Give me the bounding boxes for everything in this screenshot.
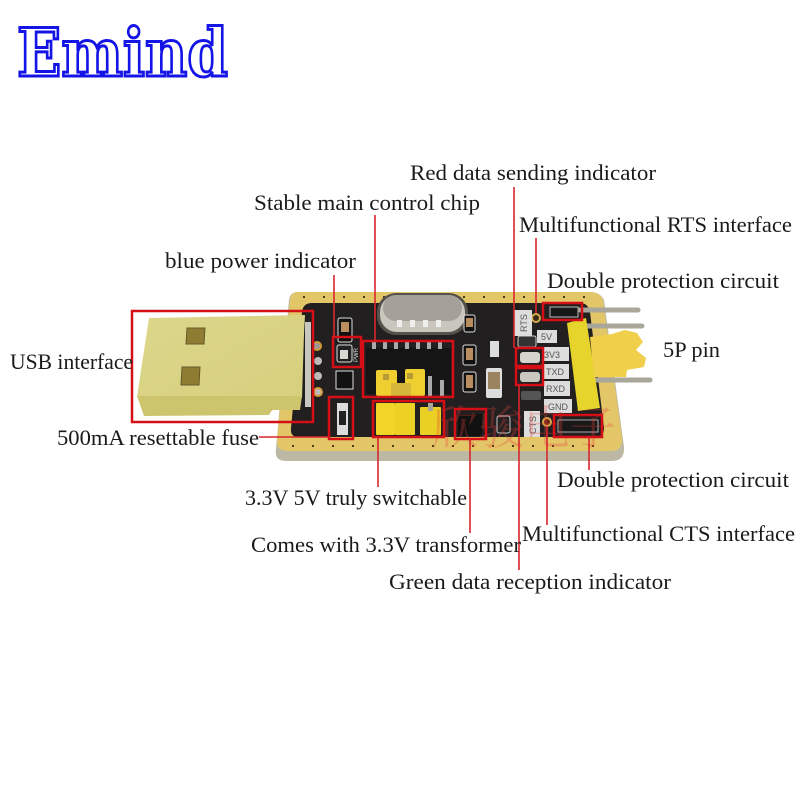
- right angle pins: [567, 310, 650, 411]
- silkscreen pin labels: 5V: [541, 332, 552, 342]
- watermark: 欣骏电子: [432, 403, 616, 454]
- brand logo: Emind: Emind: [17, 14, 228, 92]
- three pin yellow header: [376, 403, 441, 435]
- board edge: [276, 292, 624, 461]
- label: switchable voltage: 3.3V 5V truly switchable: [245, 485, 467, 510]
- label: 3.3V transformer: Comes with 3.3V transformer: [251, 532, 522, 557]
- main control chip: [366, 341, 451, 396]
- gold pad dots: [292, 297, 610, 446]
- silkscreen pin labels: PWR: [354, 347, 360, 362]
- crystal oscillator: [377, 293, 468, 335]
- USB connector plug: [137, 315, 311, 416]
- label: double protection circuit top: Double protection circuit: [547, 268, 779, 293]
- label: multifunctional CTS interface: Multifunctional CTS interface: [522, 521, 795, 546]
- silkscreen pin labels: GND: [548, 402, 568, 412]
- label: blue power indicator: blue power indicator: [165, 248, 357, 273]
- small components: [313, 307, 598, 436]
- label: USB interface: USB interface: [10, 349, 133, 374]
- silkscreen pin labels: RTS: [519, 314, 529, 332]
- label: multifunctional RTS interface: Multifunctional RTS interface: [519, 212, 792, 237]
- gold plating: [277, 292, 622, 451]
- label: 500mA resettable fuse: 500mA resettable fuse: [57, 425, 259, 450]
- silkscreen pin labels: RXD: [546, 384, 566, 394]
- label: stable main control chip: Stable main control chip: [254, 190, 480, 215]
- red leader lines: [259, 187, 589, 570]
- silkscreen pin labels: TXD: [546, 367, 565, 377]
- black solder mask: [291, 303, 604, 437]
- silkscreen pin labels: [354, 310, 572, 437]
- silkscreen pin labels: 3V3: [544, 350, 560, 360]
- small yellow jumper on chip: [376, 369, 425, 396]
- label: 5P pin: 5P pin: [663, 337, 720, 362]
- red highlight boxes: [132, 303, 602, 439]
- label: green data reception indicator: Green data reception indicator: [389, 569, 672, 594]
- 5P jumper cap: [590, 330, 646, 377]
- silkscreen pin labels: CTS: [528, 416, 538, 434]
- label: double protection circuit bottom: Double protection circuit: [557, 467, 789, 492]
- circuit board: [276, 292, 650, 461]
- label: red data sending indicator: Red data sending indicator: [410, 160, 657, 185]
